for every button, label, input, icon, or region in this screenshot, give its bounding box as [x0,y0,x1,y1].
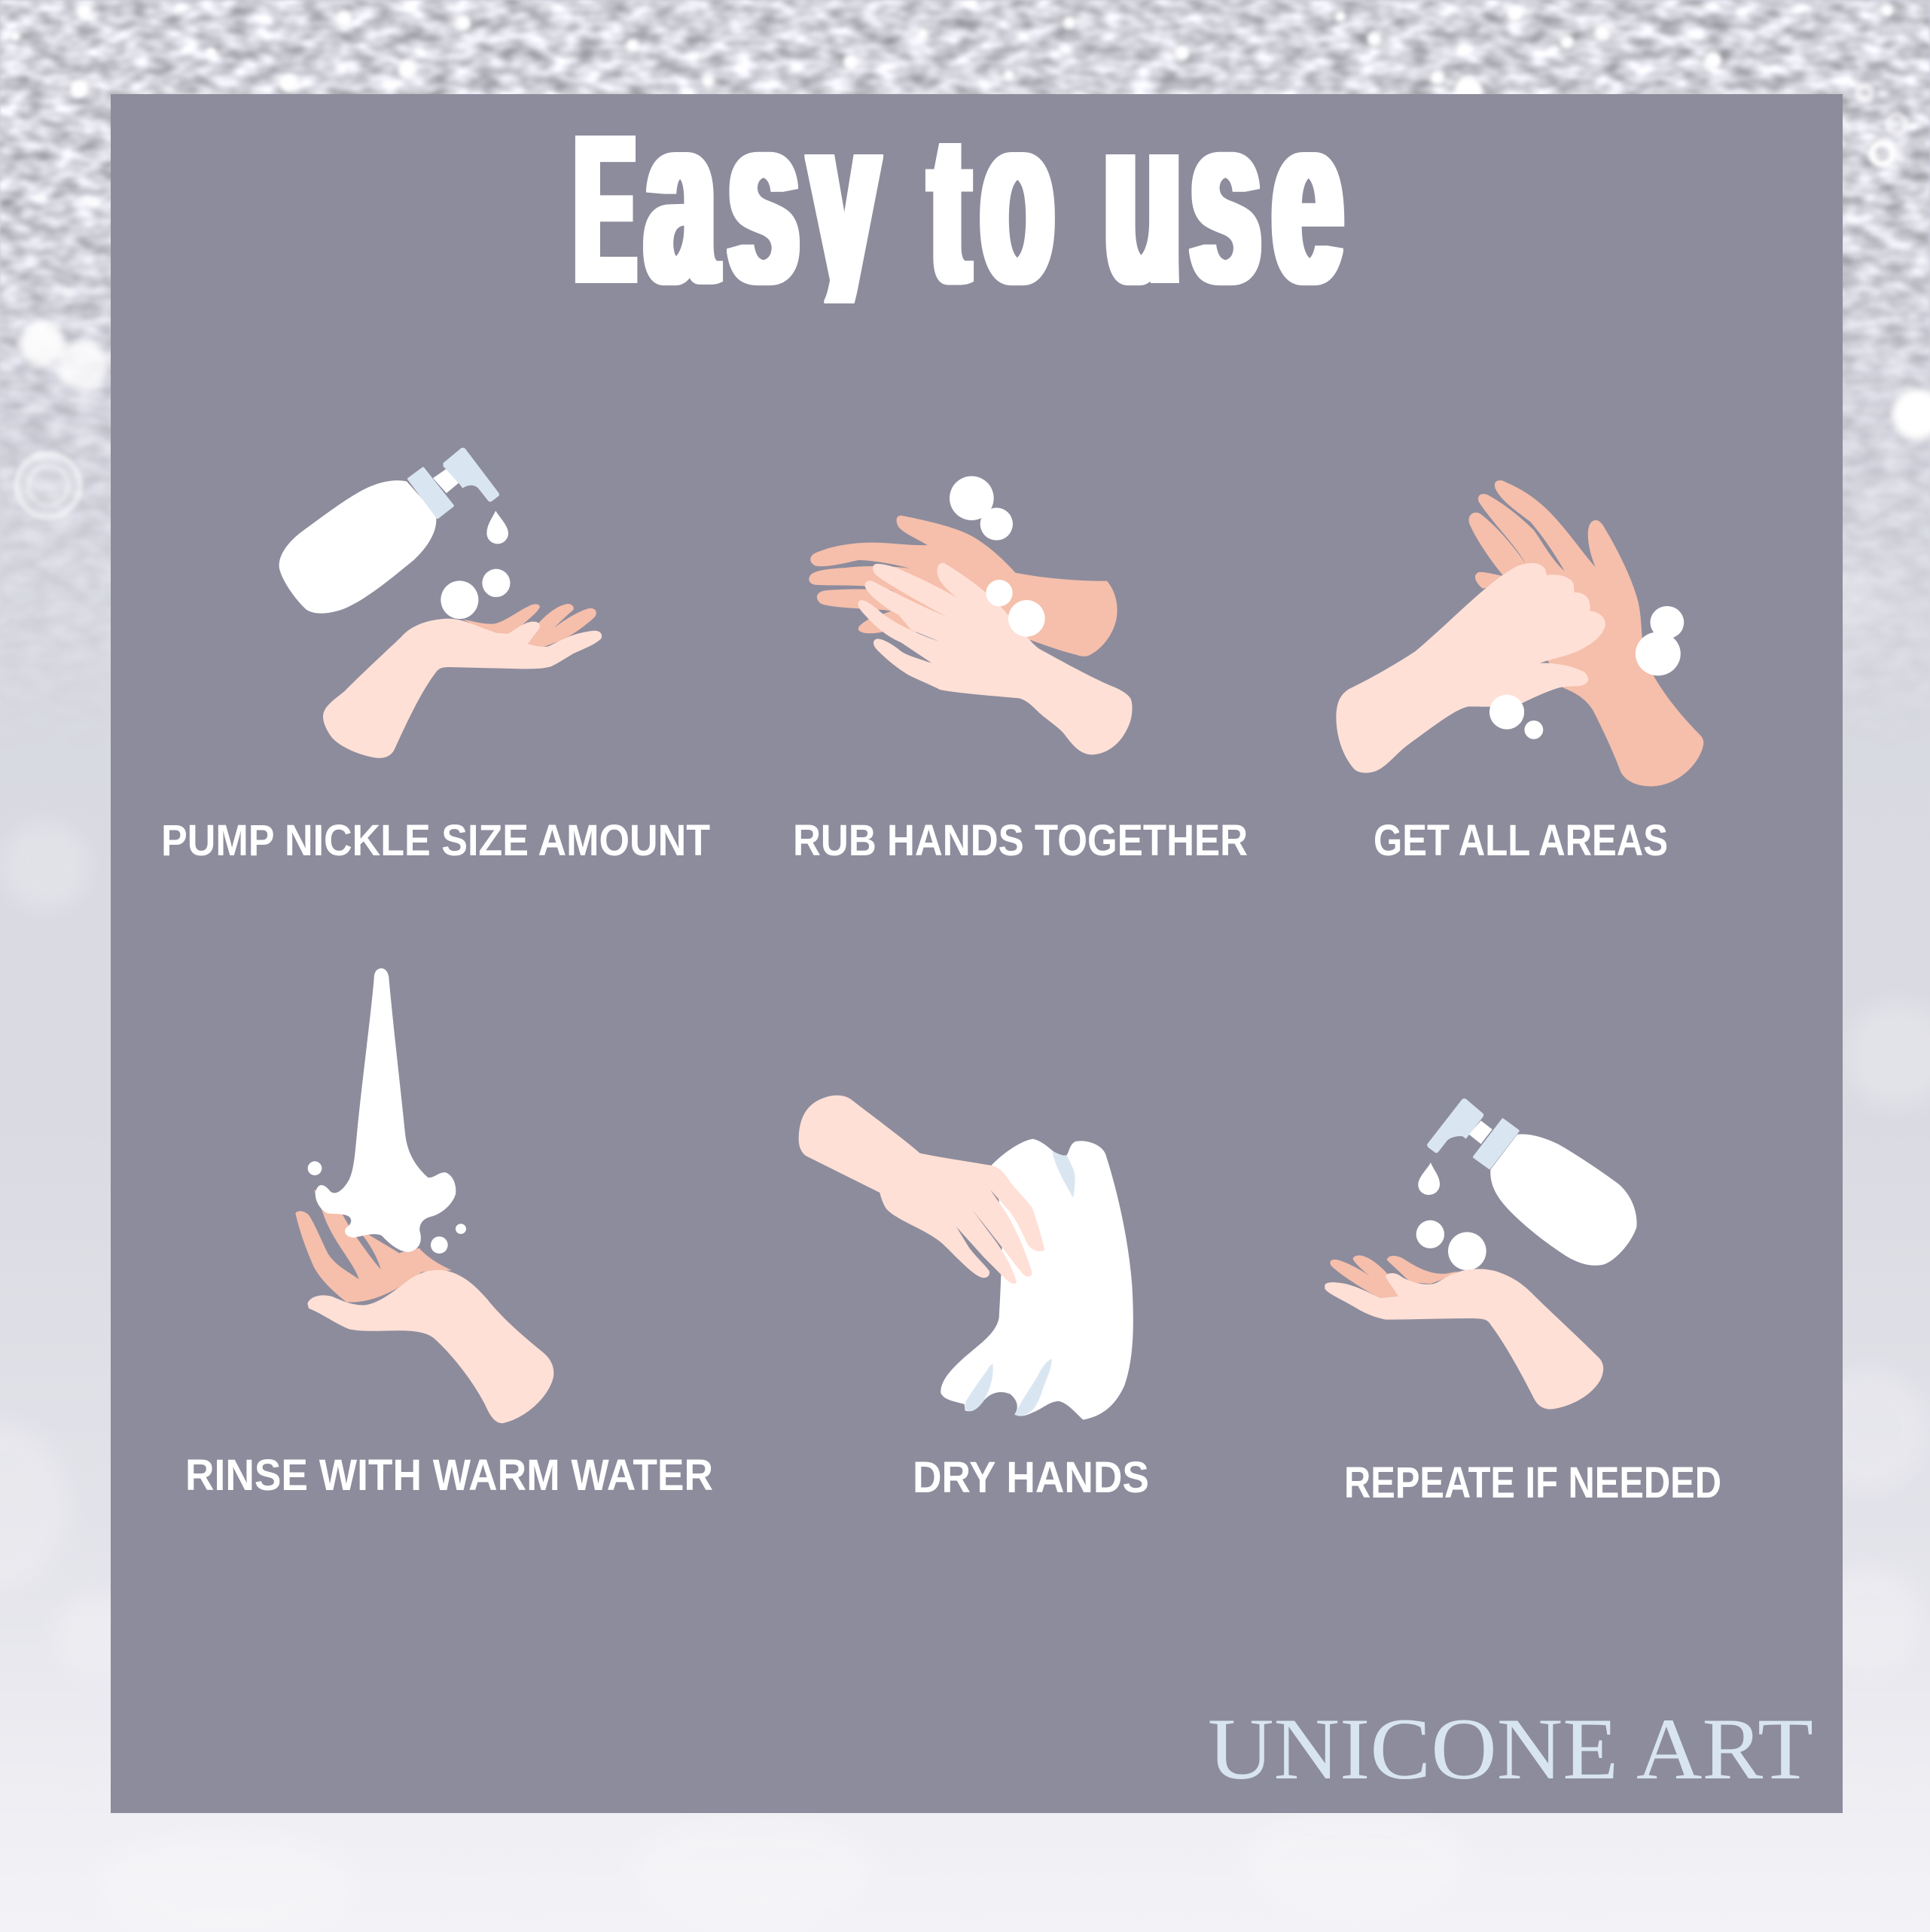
step 2: rub hands together [793,476,1248,865]
title: a [645,66,717,332]
title: o [981,66,1053,332]
icon: soap bottle pouring on hand, mirrored [1325,1099,1637,1409]
step 6: repeate if needed [1325,1099,1721,1507]
icon: two hands rubbing [809,476,1133,754]
title: u [1104,66,1181,332]
icon: soap bottle pouring on hand [279,448,602,758]
title: s [728,66,799,332]
title: y [810,66,879,334]
label: RINSE WITH WARM WATER [185,1451,713,1500]
label: DRY HANDS [913,1453,1149,1502]
icon: water stream on hand [295,968,553,1423]
icon: hand holding towel [799,1096,1133,1420]
brand logo text: UNICONE ART [1208,1701,1813,1798]
label: PUMP NICKLE SIZE AMOUNT [161,816,710,865]
title: t [930,92,969,327]
label: GET ALL AREAS [1374,816,1668,865]
title: s [1191,66,1261,332]
title [575,136,1345,303]
step 4: rinse with warm water [185,968,713,1500]
label: RUB HANDS TOGETHER [793,816,1248,865]
title: E [575,92,635,327]
step 5: dry hands [799,1096,1149,1502]
icon: hand washing back of other hand [1336,480,1703,786]
title: e [1273,66,1343,332]
step 1: pump nickle size amount [161,448,710,865]
step 3: get all areas [1336,480,1703,865]
label: REPEATE IF NEEDED [1344,1458,1721,1507]
main grey panel [111,94,1843,1813]
